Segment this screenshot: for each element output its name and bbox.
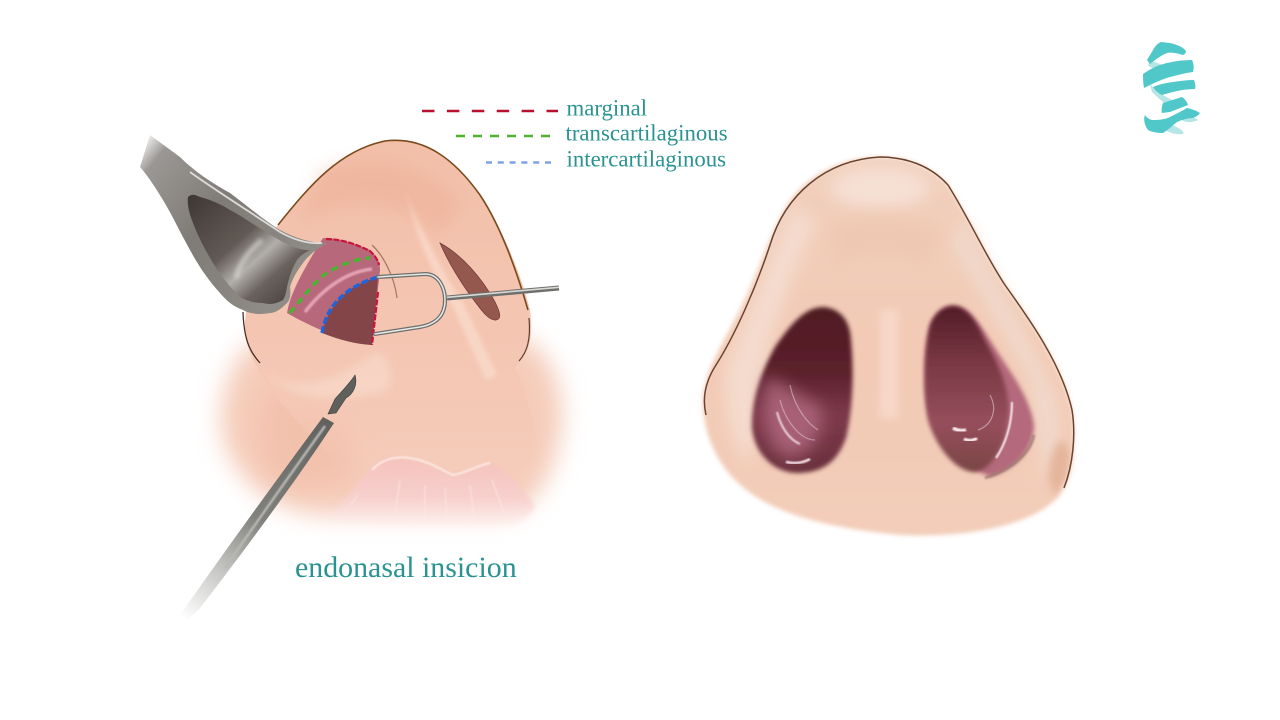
logo: teal ribbon spiral [1143,42,1200,134]
left nostril [752,307,853,473]
speculum body [140,135,327,314]
nose tip shading [300,161,462,235]
speculum rim light [190,172,322,243]
tip highlight [830,168,930,208]
transcartilaginous incision line [290,258,370,313]
right nostril [925,306,1034,478]
left wing highlight [725,205,815,465]
legend: marginal: marginal [566,96,647,120]
legend: incision types [422,96,728,172]
right nostril highlights [953,395,1012,458]
left nostril cavity [752,307,853,473]
right ala outline [519,318,530,361]
scalpel [178,375,356,625]
rim shadow [985,435,1034,478]
exposed nasal wound [287,238,380,345]
nasal speculum [140,135,327,314]
base outline [704,157,1074,488]
scalpel shaft highlight [225,426,325,568]
scalpel blade [328,375,356,414]
speculum highlight [236,240,262,278]
far nostril [440,243,500,320]
scalpel handle [178,417,334,625]
left nostril highlights [777,385,818,463]
upper lip [330,457,535,525]
wound mucosa [287,238,380,345]
bridge highlight [405,190,497,380]
retractor hook [375,274,559,334]
logo pale underlayer [1148,60,1198,134]
base nose skin [703,157,1074,536]
ala crease highlight [262,352,391,398]
illustration: basal view of nose [703,157,1074,536]
right ala shadow [1049,440,1070,495]
right wing highlight [950,220,1059,480]
nose body [245,140,540,480]
marginal incision line right [372,292,378,345]
lower face skin [221,340,562,515]
legend: intercartilaginous: intercartilaginous [566,146,726,172]
dark cavity [322,277,378,345]
left nostril glow [763,378,822,458]
legend: transcartilaginous: transcartilaginous [566,120,728,146]
near rim crease [372,245,397,298]
caption: endonasal insicion [295,551,517,584]
nose outline [278,140,528,310]
intercartilaginous incision line [322,277,378,333]
lip streaks [350,480,505,518]
left ala outline [243,312,260,363]
mucosa sheen [305,269,372,312]
philtrum shading [258,385,353,490]
marginal incision line top [326,239,379,265]
illustration: oblique nose with endonasal incision [140,135,562,625]
tip shadow bands [830,215,945,270]
columella highlight [880,310,898,418]
lip highlight edge [372,457,490,475]
outer vestibule [925,306,1034,477]
right nostril cavity [925,306,1009,472]
speculum inner blade [188,195,310,304]
logo ribbon bands [1143,42,1200,133]
